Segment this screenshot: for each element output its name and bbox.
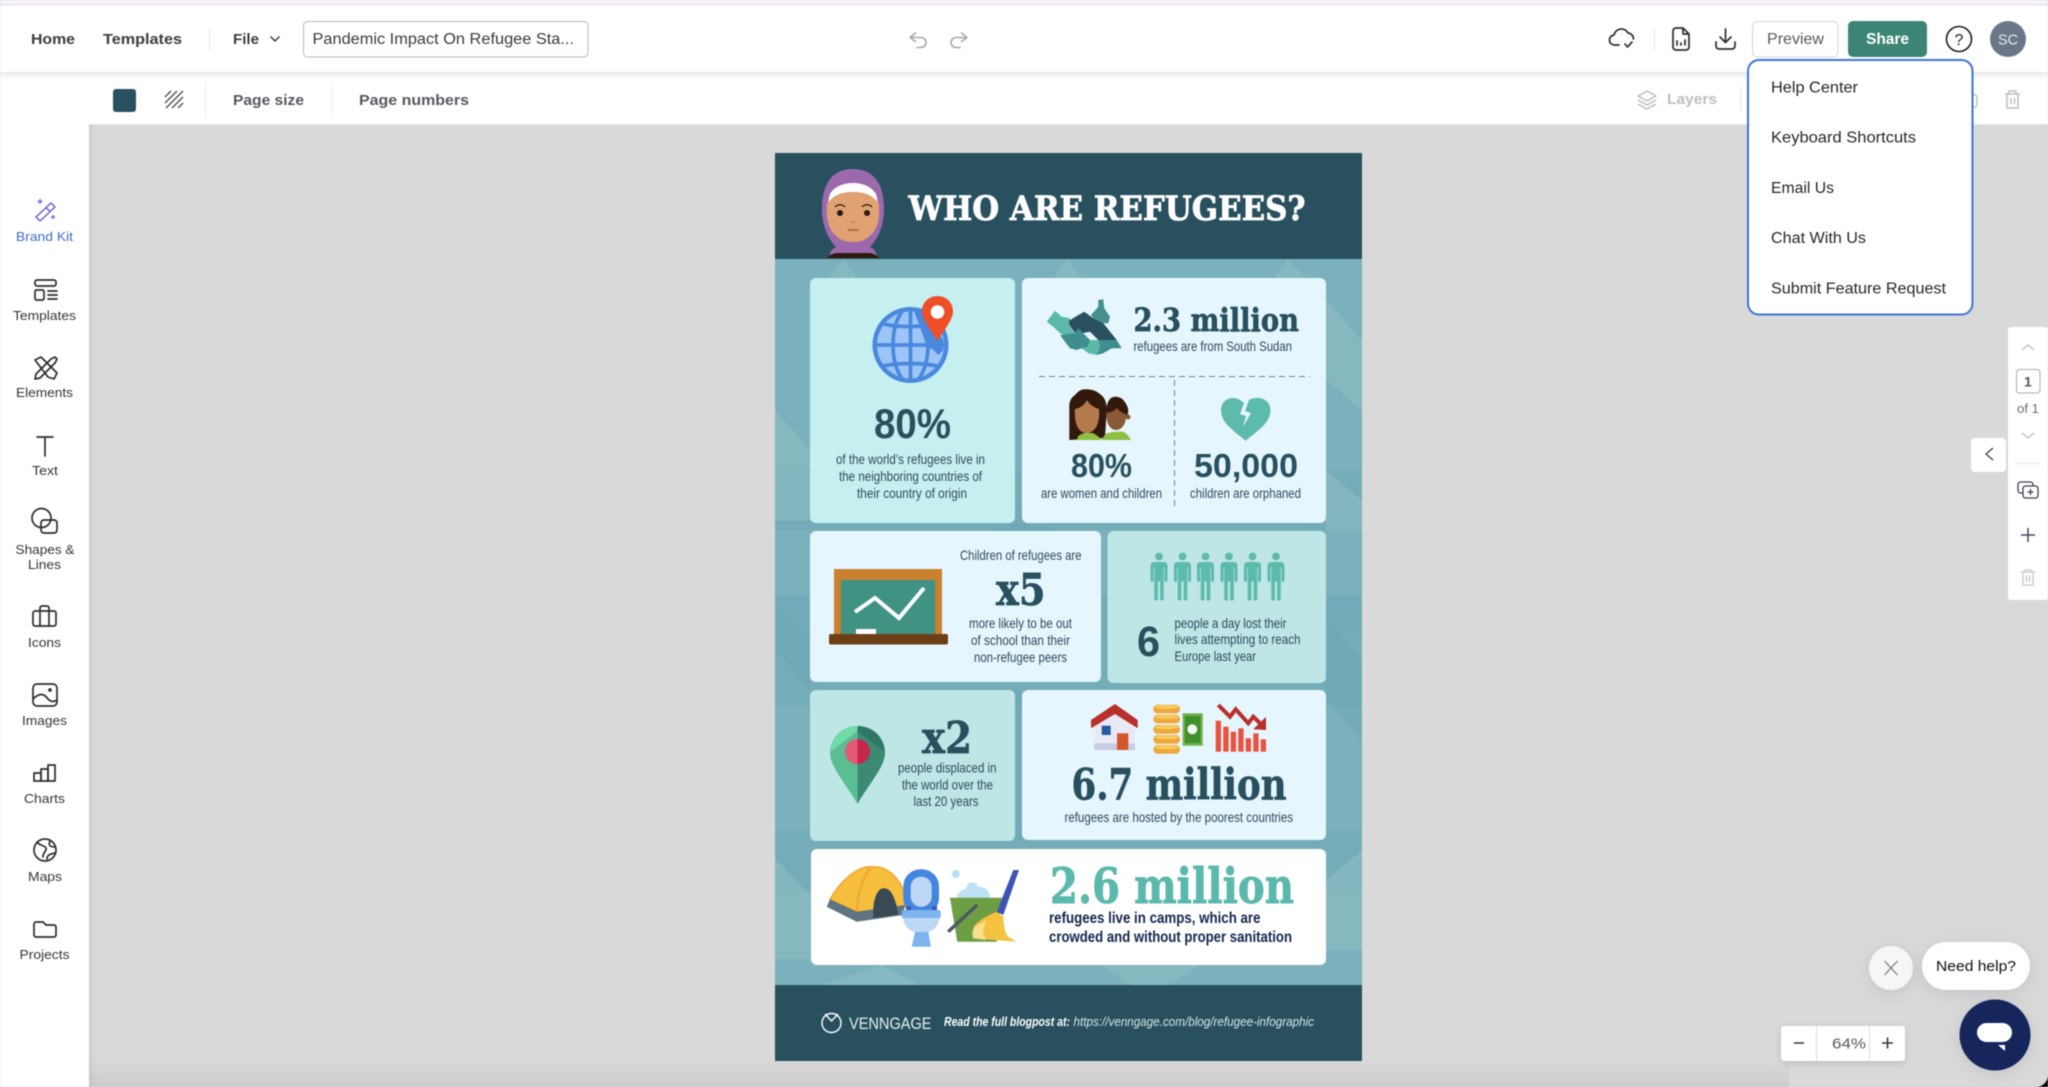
current page number: 1 bbox=[2024, 374, 2032, 390]
footer band bbox=[775, 985, 1362, 1061]
statistic: 6.7 million: 6.7 million bbox=[1072, 760, 1286, 810]
layers button bbox=[1638, 91, 1717, 109]
description: people displaced: the world over the bbox=[902, 776, 993, 792]
menu item: Chat With Us: Chat With Us bbox=[1771, 230, 1866, 247]
menu item: Email Us: Email Us bbox=[1771, 180, 1834, 197]
icon: broken heart bbox=[1221, 398, 1270, 441]
description: out of school: of school than their bbox=[971, 632, 1070, 648]
need help bubble: Need help? bbox=[1936, 958, 2016, 975]
sidebar item: Projects: Projects bbox=[20, 947, 70, 962]
description: out of school: more likely to be out bbox=[969, 615, 1072, 631]
sidebar item: Images: Images bbox=[22, 713, 68, 728]
icon: chart document bbox=[1673, 28, 1689, 50]
share button bbox=[1848, 21, 1927, 57]
statistic: x5: x5 bbox=[996, 565, 1046, 616]
menu item: Help Center: Help Center bbox=[1771, 80, 1858, 96]
sidebar item: Charts: Charts bbox=[24, 791, 66, 806]
left sidebar bbox=[0, 72, 89, 1087]
icon: delete disabled bbox=[2005, 91, 2020, 108]
preview button bbox=[1752, 22, 1838, 57]
icon: tent bbox=[827, 867, 905, 922]
current page number bbox=[2016, 370, 2040, 393]
nav: Templates: Templates bbox=[103, 31, 182, 48]
sidebar item: Maps bbox=[28, 839, 63, 884]
share button: Share bbox=[1866, 31, 1909, 48]
document name input: Pandemic Impact On Refugee Sta... bbox=[312, 31, 574, 48]
help dropdown menu bbox=[1748, 54, 1972, 314]
statistic: 6: 6 bbox=[1137, 618, 1160, 666]
sidebar item: Brand Kit bbox=[16, 199, 73, 244]
title: WHO ARE REFUGEES? bbox=[908, 189, 1306, 229]
statistic: 80% women and children: 80% bbox=[1071, 447, 1132, 484]
need help bubble bbox=[1922, 942, 2030, 990]
sidebar item: Elements bbox=[16, 357, 74, 400]
footer logo: Venngage: VENNGAGE bbox=[849, 1014, 932, 1033]
description: camps bbox=[1049, 910, 1292, 946]
help icon: ? bbox=[1954, 32, 1964, 49]
panel: South Sudan statistics bbox=[1022, 278, 1326, 523]
sidebar item: Shapes and Lines bbox=[16, 508, 75, 572]
description: people displaced bbox=[898, 760, 996, 809]
footer logo: Venngage bbox=[822, 1014, 932, 1033]
sidebar item: Projects bbox=[20, 922, 70, 962]
icon: falling bar chart bbox=[1216, 705, 1266, 752]
nav: File menu: File bbox=[233, 31, 259, 48]
statistic: x2: x2 bbox=[922, 713, 972, 764]
footer blogpost link: https://venngage.com/blog/refugee-infographic bbox=[1074, 1015, 1315, 1029]
description: lost lives: Europe last year bbox=[1174, 648, 1256, 664]
infographic poster bbox=[775, 153, 1362, 1061]
help icon bbox=[1946, 26, 1972, 52]
header band bbox=[775, 153, 1362, 259]
icon: map of South Sudan bbox=[1047, 299, 1122, 355]
footer blogpost link: Read the full blogpost at: bbox=[944, 1015, 1070, 1029]
chat launcher button bbox=[1960, 1000, 2030, 1070]
icon: woman in hijab bbox=[822, 169, 884, 258]
nav: File menu bbox=[233, 31, 280, 48]
icon: cloud saved bbox=[1609, 29, 1634, 47]
description: world's refugees: their country of origin bbox=[857, 485, 967, 501]
sidebar item: Shapes and Lines: Shapes & bbox=[16, 542, 75, 557]
sidebar item: Maps: Maps bbox=[28, 869, 63, 884]
sidebar item: Elements: Elements bbox=[16, 385, 74, 400]
panel: 80% neighboring countries bbox=[810, 278, 1015, 523]
sidebar item: Text bbox=[32, 437, 58, 478]
zoom control bbox=[1781, 1026, 1905, 1061]
panel: camps and sanitation bbox=[811, 849, 1326, 965]
sidebar item: Charts bbox=[24, 765, 66, 806]
page navigator panel bbox=[2008, 327, 2048, 600]
icon: map pin bbox=[830, 726, 885, 804]
statistic: 50,000 orphaned bbox=[1190, 447, 1301, 501]
sidebar item: Text: Text bbox=[32, 463, 58, 478]
icon: row of six people bbox=[1150, 553, 1284, 601]
icon: duplicate page bbox=[2018, 482, 2038, 498]
icon: woman and child bbox=[1069, 389, 1131, 440]
preview button: Preview bbox=[1767, 31, 1824, 48]
caption: South Sudan: refugees are from South Sudan bbox=[1134, 338, 1292, 354]
pattern swatch icon bbox=[165, 91, 183, 108]
icon: house bbox=[1091, 704, 1138, 750]
page size button: Page size bbox=[233, 92, 304, 109]
statistic: 2.6 million: 2.6 million bbox=[1050, 857, 1294, 915]
zoom percentage: 64% bbox=[1832, 1036, 1866, 1052]
description: people displaced: people displaced in bbox=[898, 760, 996, 776]
caption: children of refugees: Children of refugees are bbox=[960, 547, 1082, 563]
icon: add page bbox=[2021, 528, 2035, 542]
sidebar item: Brand Kit: Brand Kit bbox=[16, 229, 73, 244]
page toolbar bbox=[89, 72, 2048, 125]
description: people displaced: last 20 years bbox=[914, 793, 978, 809]
icon: globe with location pin bbox=[870, 296, 953, 385]
description: lost lives: lives attempting to reach bbox=[1174, 631, 1300, 647]
page count: of 1 bbox=[2017, 401, 2039, 416]
caption: poorest countries: refugees are hosted by the poorest countries bbox=[1064, 809, 1293, 825]
description: lost lives bbox=[1174, 615, 1300, 664]
user avatar bbox=[1990, 21, 2026, 57]
description: lost lives: people a day lost their bbox=[1174, 615, 1287, 631]
icon: bucket and broom bbox=[949, 870, 1019, 942]
icon: toilet bbox=[902, 869, 941, 947]
description: world's refugees bbox=[836, 451, 985, 501]
description: world's refugees: the neighboring countries of bbox=[839, 468, 982, 484]
sidebar item: Shapes and Lines: Lines bbox=[28, 557, 62, 572]
footer blogpost link bbox=[944, 1015, 1315, 1029]
collapse panel tab bbox=[1971, 438, 2006, 472]
description: camps: crowded and without proper sanitation bbox=[1049, 929, 1292, 946]
panel: poorest countries bbox=[1022, 690, 1326, 840]
icon: chalkboard bbox=[829, 569, 948, 644]
panel: children out of school bbox=[810, 531, 1101, 682]
layers button: Layers bbox=[1667, 91, 1717, 108]
icon: download bbox=[1716, 29, 1735, 49]
page numbers button: Page numbers bbox=[359, 92, 469, 109]
description: out of school bbox=[969, 615, 1072, 665]
icon: hidden copy bbox=[1968, 95, 1977, 107]
statistic: 50,000 orphaned: children are orphaned bbox=[1190, 485, 1301, 501]
description: world's refugees: of the world’s refugees live in bbox=[836, 451, 985, 467]
poster patterned background bbox=[775, 259, 1362, 985]
sidebar item: Images bbox=[22, 684, 68, 728]
panel: six people a day bbox=[1108, 531, 1326, 683]
top navigation bar bbox=[0, 0, 2048, 72]
description: camps: refugees live in camps, which are bbox=[1049, 910, 1261, 927]
help chat close button bbox=[1869, 946, 1913, 990]
description: out of school: non-refugee peers bbox=[974, 649, 1067, 665]
statistic: 2.3 million: 2.3 million bbox=[1134, 301, 1299, 339]
panel: displaced people x2 bbox=[810, 690, 1015, 841]
colour swatch bbox=[113, 89, 136, 112]
user avatar: SC bbox=[1998, 32, 2018, 48]
sidebar item: Templates bbox=[13, 280, 77, 323]
statistic: 50,000 orphaned: 50,000 bbox=[1194, 447, 1298, 484]
menu item: Keyboard Shortcuts: Keyboard Shortcuts bbox=[1771, 130, 1916, 146]
nav: Home: Home bbox=[31, 31, 75, 48]
menu item: Submit Feature Request: Submit Feature Request bbox=[1771, 280, 1947, 298]
icon: coins and banknote bbox=[1153, 705, 1203, 754]
icon: delete page bbox=[2021, 570, 2035, 585]
statistic: 80% women and children bbox=[1041, 447, 1162, 501]
sidebar item: Icons bbox=[28, 606, 62, 650]
statistic: 80%: 80% bbox=[874, 400, 951, 447]
sidebar item: Icons: Icons bbox=[28, 635, 62, 650]
sidebar item: Templates: Templates bbox=[13, 308, 77, 323]
undo and redo icons bbox=[910, 33, 967, 48]
document name input bbox=[304, 22, 588, 57]
statistic: 80% women and children: are women and children bbox=[1041, 485, 1162, 501]
